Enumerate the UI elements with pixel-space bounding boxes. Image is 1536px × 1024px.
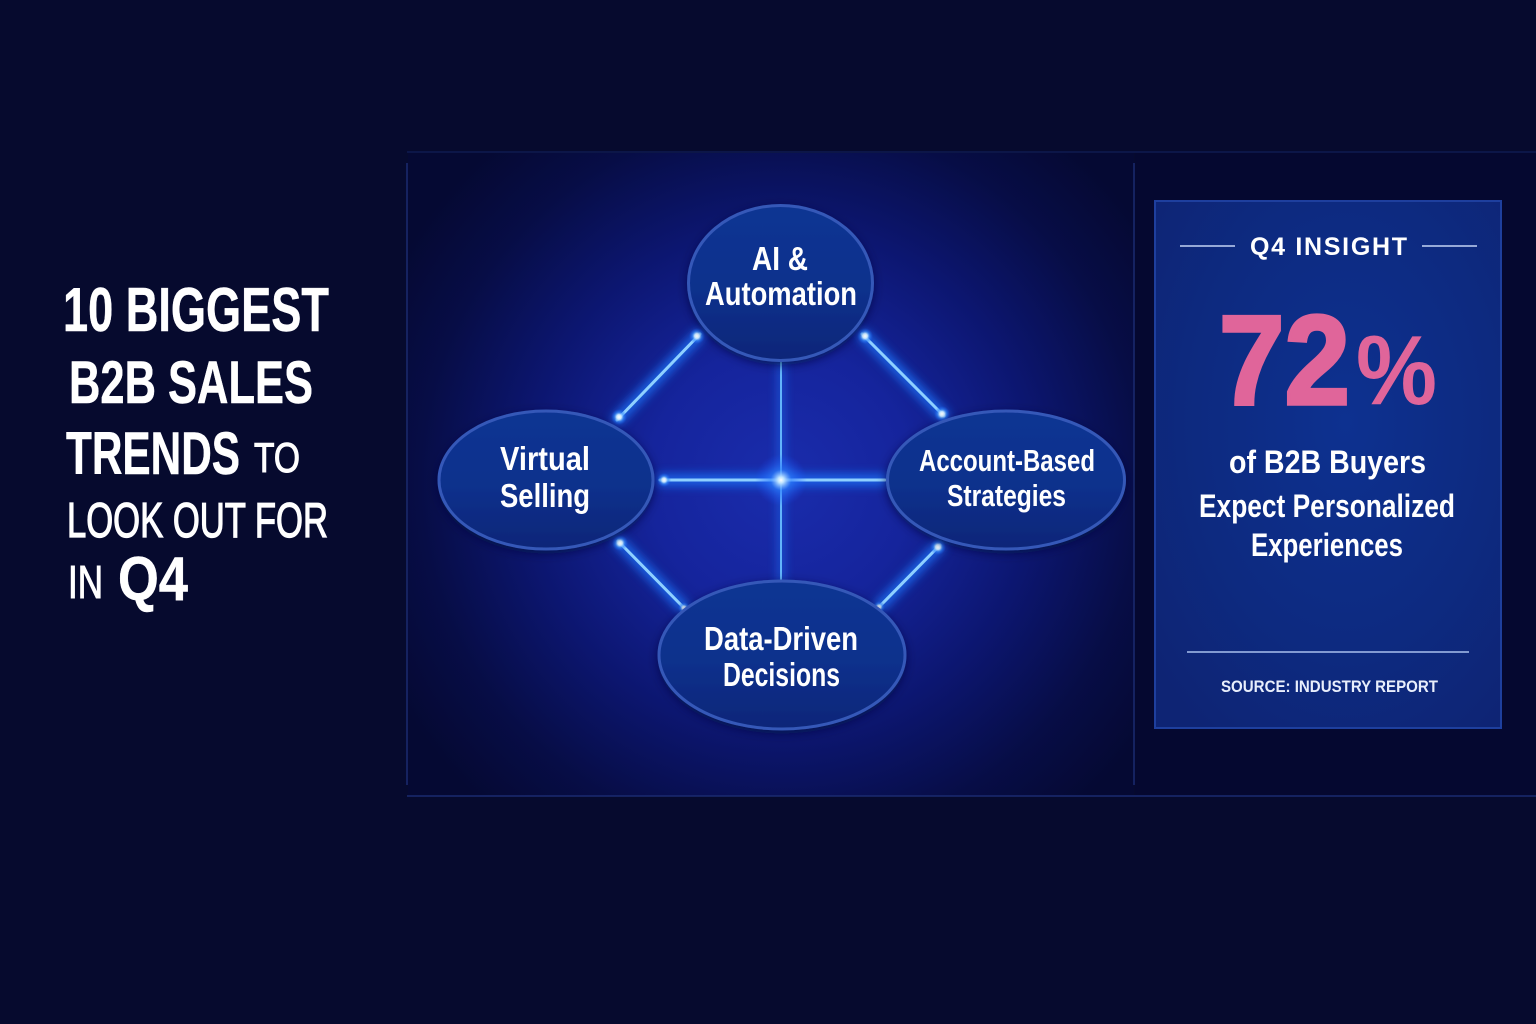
node: Data-Driven Decisions xyxy=(659,581,905,729)
title: LOOK OUT FOR xyxy=(67,494,328,548)
node: Account-Based Strategies: Strategies xyxy=(947,478,1066,513)
card heading: Q4 INSIGHT xyxy=(1250,233,1407,261)
node: AI & Automation: Automation xyxy=(705,275,857,312)
node: Virtual Selling xyxy=(439,411,653,549)
node: Account-Based Strategies xyxy=(888,411,1124,549)
title: TRENDS xyxy=(66,420,240,487)
source note: SOURCE: INDUSTRY REPORT xyxy=(1221,677,1439,696)
title: B2B SALES xyxy=(69,349,313,416)
panel: Q4 insight card xyxy=(1155,201,1501,728)
stat: 72%: 72 xyxy=(1219,289,1350,431)
node: Virtual Selling: Virtual xyxy=(500,440,590,477)
title: TO xyxy=(254,434,300,481)
stat description: Experiences xyxy=(1251,527,1403,563)
stat: 72%: % xyxy=(1356,315,1437,425)
node: Virtual Selling: Selling xyxy=(500,477,590,514)
node: AI & Automation: AI & xyxy=(752,240,808,277)
stat description xyxy=(1199,444,1455,563)
node: AI & Automation xyxy=(688,206,872,360)
title xyxy=(63,276,329,614)
stat description: Expect Personalized xyxy=(1199,488,1455,524)
title: Q4 xyxy=(118,545,188,614)
node: Data-Driven Decisions: Data-Driven xyxy=(704,620,858,657)
stat: 72% xyxy=(1219,289,1437,431)
node: Account-Based Strategies: Account-Based xyxy=(919,443,1095,478)
node: Data-Driven Decisions: Decisions xyxy=(723,656,840,693)
connector endpoints xyxy=(611,328,950,614)
connector network xyxy=(617,334,944,610)
stat description: of B2B Buyers xyxy=(1229,444,1426,480)
icon: central spark xyxy=(755,454,807,506)
panel: diagram background glow xyxy=(408,153,1134,796)
panel: insight column background xyxy=(1135,153,1536,796)
title: 10 BIGGEST xyxy=(63,276,329,345)
title: IN xyxy=(68,556,103,608)
